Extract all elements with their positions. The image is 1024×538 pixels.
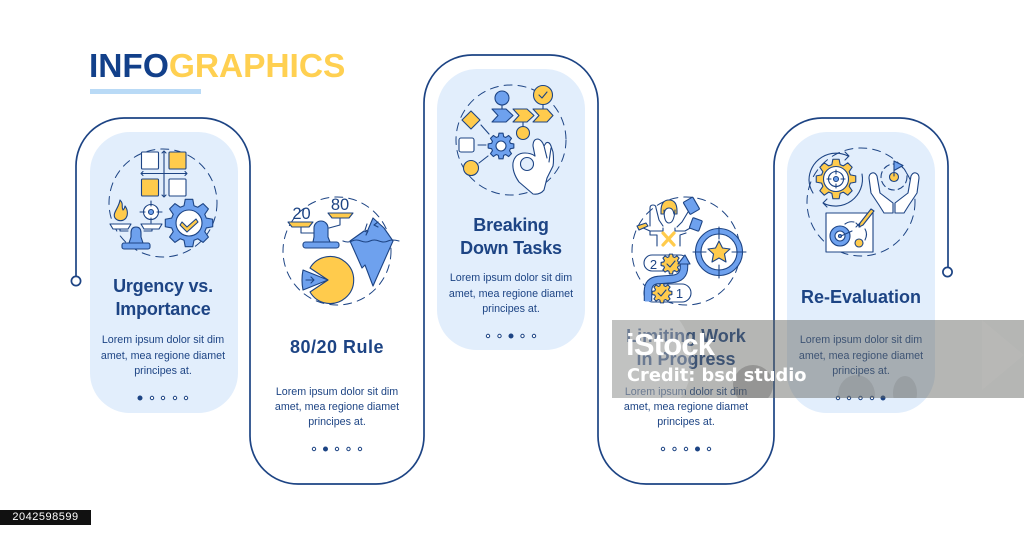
text: panel 1: amet, mea regione diamet xyxy=(101,350,225,362)
text: panel 4: principes at. xyxy=(657,416,715,428)
text: panel 3: principes at. xyxy=(482,303,540,315)
icon: 80/20 rule: 80 xyxy=(331,196,349,214)
heading: Urgency vs. Importance xyxy=(113,276,213,319)
icon: 80/20 rule: 20 xyxy=(292,205,311,223)
text: panel 2: principes at. xyxy=(308,416,366,428)
heading: Re-Evaluation: Re-Evaluation xyxy=(801,287,921,307)
text: panel 3: amet, mea regione diamet xyxy=(449,288,573,300)
image id badge xyxy=(0,510,91,525)
text: panel 2: amet, mea regione diamet xyxy=(275,401,399,413)
watermark band xyxy=(612,320,1024,398)
watermark logo: iStock xyxy=(626,327,714,362)
image id badge: 2042598599 xyxy=(12,511,79,523)
panel backgrounds xyxy=(90,69,935,413)
text: panel 2: Lorem ipsum dolor sit dim xyxy=(276,386,398,398)
text: panel 4 xyxy=(624,386,748,428)
title: INFOGRAPHICS xyxy=(89,48,345,85)
heading: Breaking Down Tasks xyxy=(460,215,562,258)
text: panel 2 xyxy=(275,386,399,428)
text: panel 5 xyxy=(799,334,923,377)
text: panel 3 xyxy=(449,272,573,315)
heading: Breaking Down Tasks: Breaking xyxy=(473,215,549,235)
heading: Urgency vs. Importance: Urgency vs. xyxy=(113,276,213,296)
text: panel 4: Lorem ipsum dolor sit dim xyxy=(625,386,747,398)
heading: Limiting Work in Progress: in Progress xyxy=(636,348,736,368)
heading: Limiting Work in Progress xyxy=(626,326,746,369)
heading: Urgency vs. Importance: Importance xyxy=(115,298,211,318)
text: panel 1: Lorem ipsum dolor sit dim xyxy=(102,334,224,346)
text: panel 5: principes at. xyxy=(832,365,890,377)
text: panel 1 xyxy=(101,334,225,377)
icon: limiting work in progress: 2 xyxy=(650,257,657,272)
heading: Limiting Work in Progress: Limiting Work xyxy=(626,326,746,346)
heading: 80/20 Rule: 80/20 Rule xyxy=(290,337,384,357)
icon: limiting work in progress: 1 xyxy=(676,286,683,301)
text: panel 1: principes at. xyxy=(134,365,192,377)
text: panel 5: Lorem ipsum dolor sit dim xyxy=(800,334,922,346)
heading: Breaking Down Tasks: Down Tasks xyxy=(460,238,562,258)
text: panel 5: amet, mea regione diamet xyxy=(799,350,923,362)
watermark credit: Credit: bsd studio xyxy=(627,365,807,386)
text: panel 3: Lorem ipsum dolor sit dim xyxy=(450,272,572,284)
text: panel 4: amet, mea regione diamet xyxy=(624,401,748,413)
